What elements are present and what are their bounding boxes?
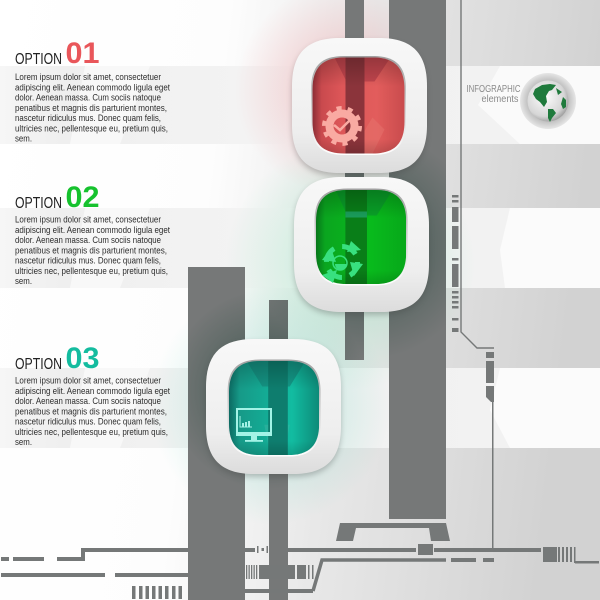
option 02 heading: OPTION — [15, 195, 62, 212]
option 01 text: ultricies nec, pellentesque eu, pretium quis, — [15, 123, 168, 134]
option 03 heading: OPTION — [15, 356, 62, 373]
option 03 heading: 03 — [66, 342, 100, 375]
button 01: red — [292, 38, 427, 176]
option 02 text: ultricies nec, pellentesque eu, pretium quis, — [15, 266, 168, 277]
option 01 heading — [15, 37, 100, 70]
option 03 text — [15, 376, 170, 448]
dark tint on bars near the buttons — [188, 163, 446, 449]
option 03 text: nascetur ridiculus mus. Donec quam felis, — [15, 416, 161, 428]
option 02 text: adipiscing elit. Aenean commodo ligula eget — [15, 225, 170, 236]
option 03 heading — [15, 342, 100, 375]
horizontal faceted bands — [0, 66, 600, 448]
option 03 text: ultricies nec, pellentesque eu, pretium quis, — [15, 427, 168, 438]
option 02 text — [15, 214, 170, 287]
option 01 text: nascetur ridiculus mus. Donec quam felis, — [15, 113, 161, 124]
coloured glows — [150, 0, 475, 525]
option 01 text: penatibus et magnis dis parturient montes, — [15, 103, 167, 114]
option 01 text: Lorem ipsum dolor sit amet, consectetuer — [15, 72, 162, 83]
icon: monitor with chart — [236, 409, 272, 442]
option 01 heading: 01 — [66, 37, 100, 70]
option 02 text: dolor. Aenean massa. Cum sociis natoque — [15, 235, 161, 246]
grey vertical bars — [188, 0, 446, 600]
option 03 text: adipiscing elit. Aenean commodo ligula eget — [15, 386, 170, 397]
option 01 text — [15, 72, 170, 144]
option 02 text: Lorem ipsum dolor sit amet, consectetuer — [15, 214, 162, 226]
option 02 heading: 02 — [66, 181, 100, 214]
button 03: teal — [206, 339, 341, 477]
option 02 heading — [15, 181, 100, 214]
option 02 text: nascetur ridiculus mus. Donec quam felis, — [15, 256, 161, 266]
button 02: green — [294, 177, 429, 315]
icon: gear — [324, 108, 360, 144]
option 03 text: Lorem ipsum dolor sit amet, consectetuer — [15, 376, 162, 386]
icon: circular arrows — [322, 241, 363, 283]
title: infographic elements: INFOGRAPHIC — [466, 84, 520, 95]
circuit lines, top right — [452, 0, 494, 548]
option 03 text: dolor. Aenean massa. Cum sociis natoque — [15, 396, 161, 407]
option 02 text: sem. — [15, 276, 32, 287]
option 03 text: penatibus et magnis dis parturient montes, — [15, 406, 167, 417]
base structure, bottom — [1, 523, 599, 599]
title: infographic elements — [466, 84, 520, 105]
option 02 text: penatibus et magnis dis parturient montes, — [15, 245, 167, 256]
title: infographic elements: elements — [482, 93, 518, 105]
option 03 text: sem. — [15, 437, 32, 448]
option 01 text: sem. — [15, 134, 32, 144]
icon: globe — [520, 73, 576, 129]
option 01 text: dolor. Aenean massa. Cum sociis natoque — [15, 92, 161, 104]
option 01 text: adipiscing elit. Aenean commodo ligula eget — [15, 82, 170, 93]
option 01 heading: OPTION — [15, 51, 62, 68]
